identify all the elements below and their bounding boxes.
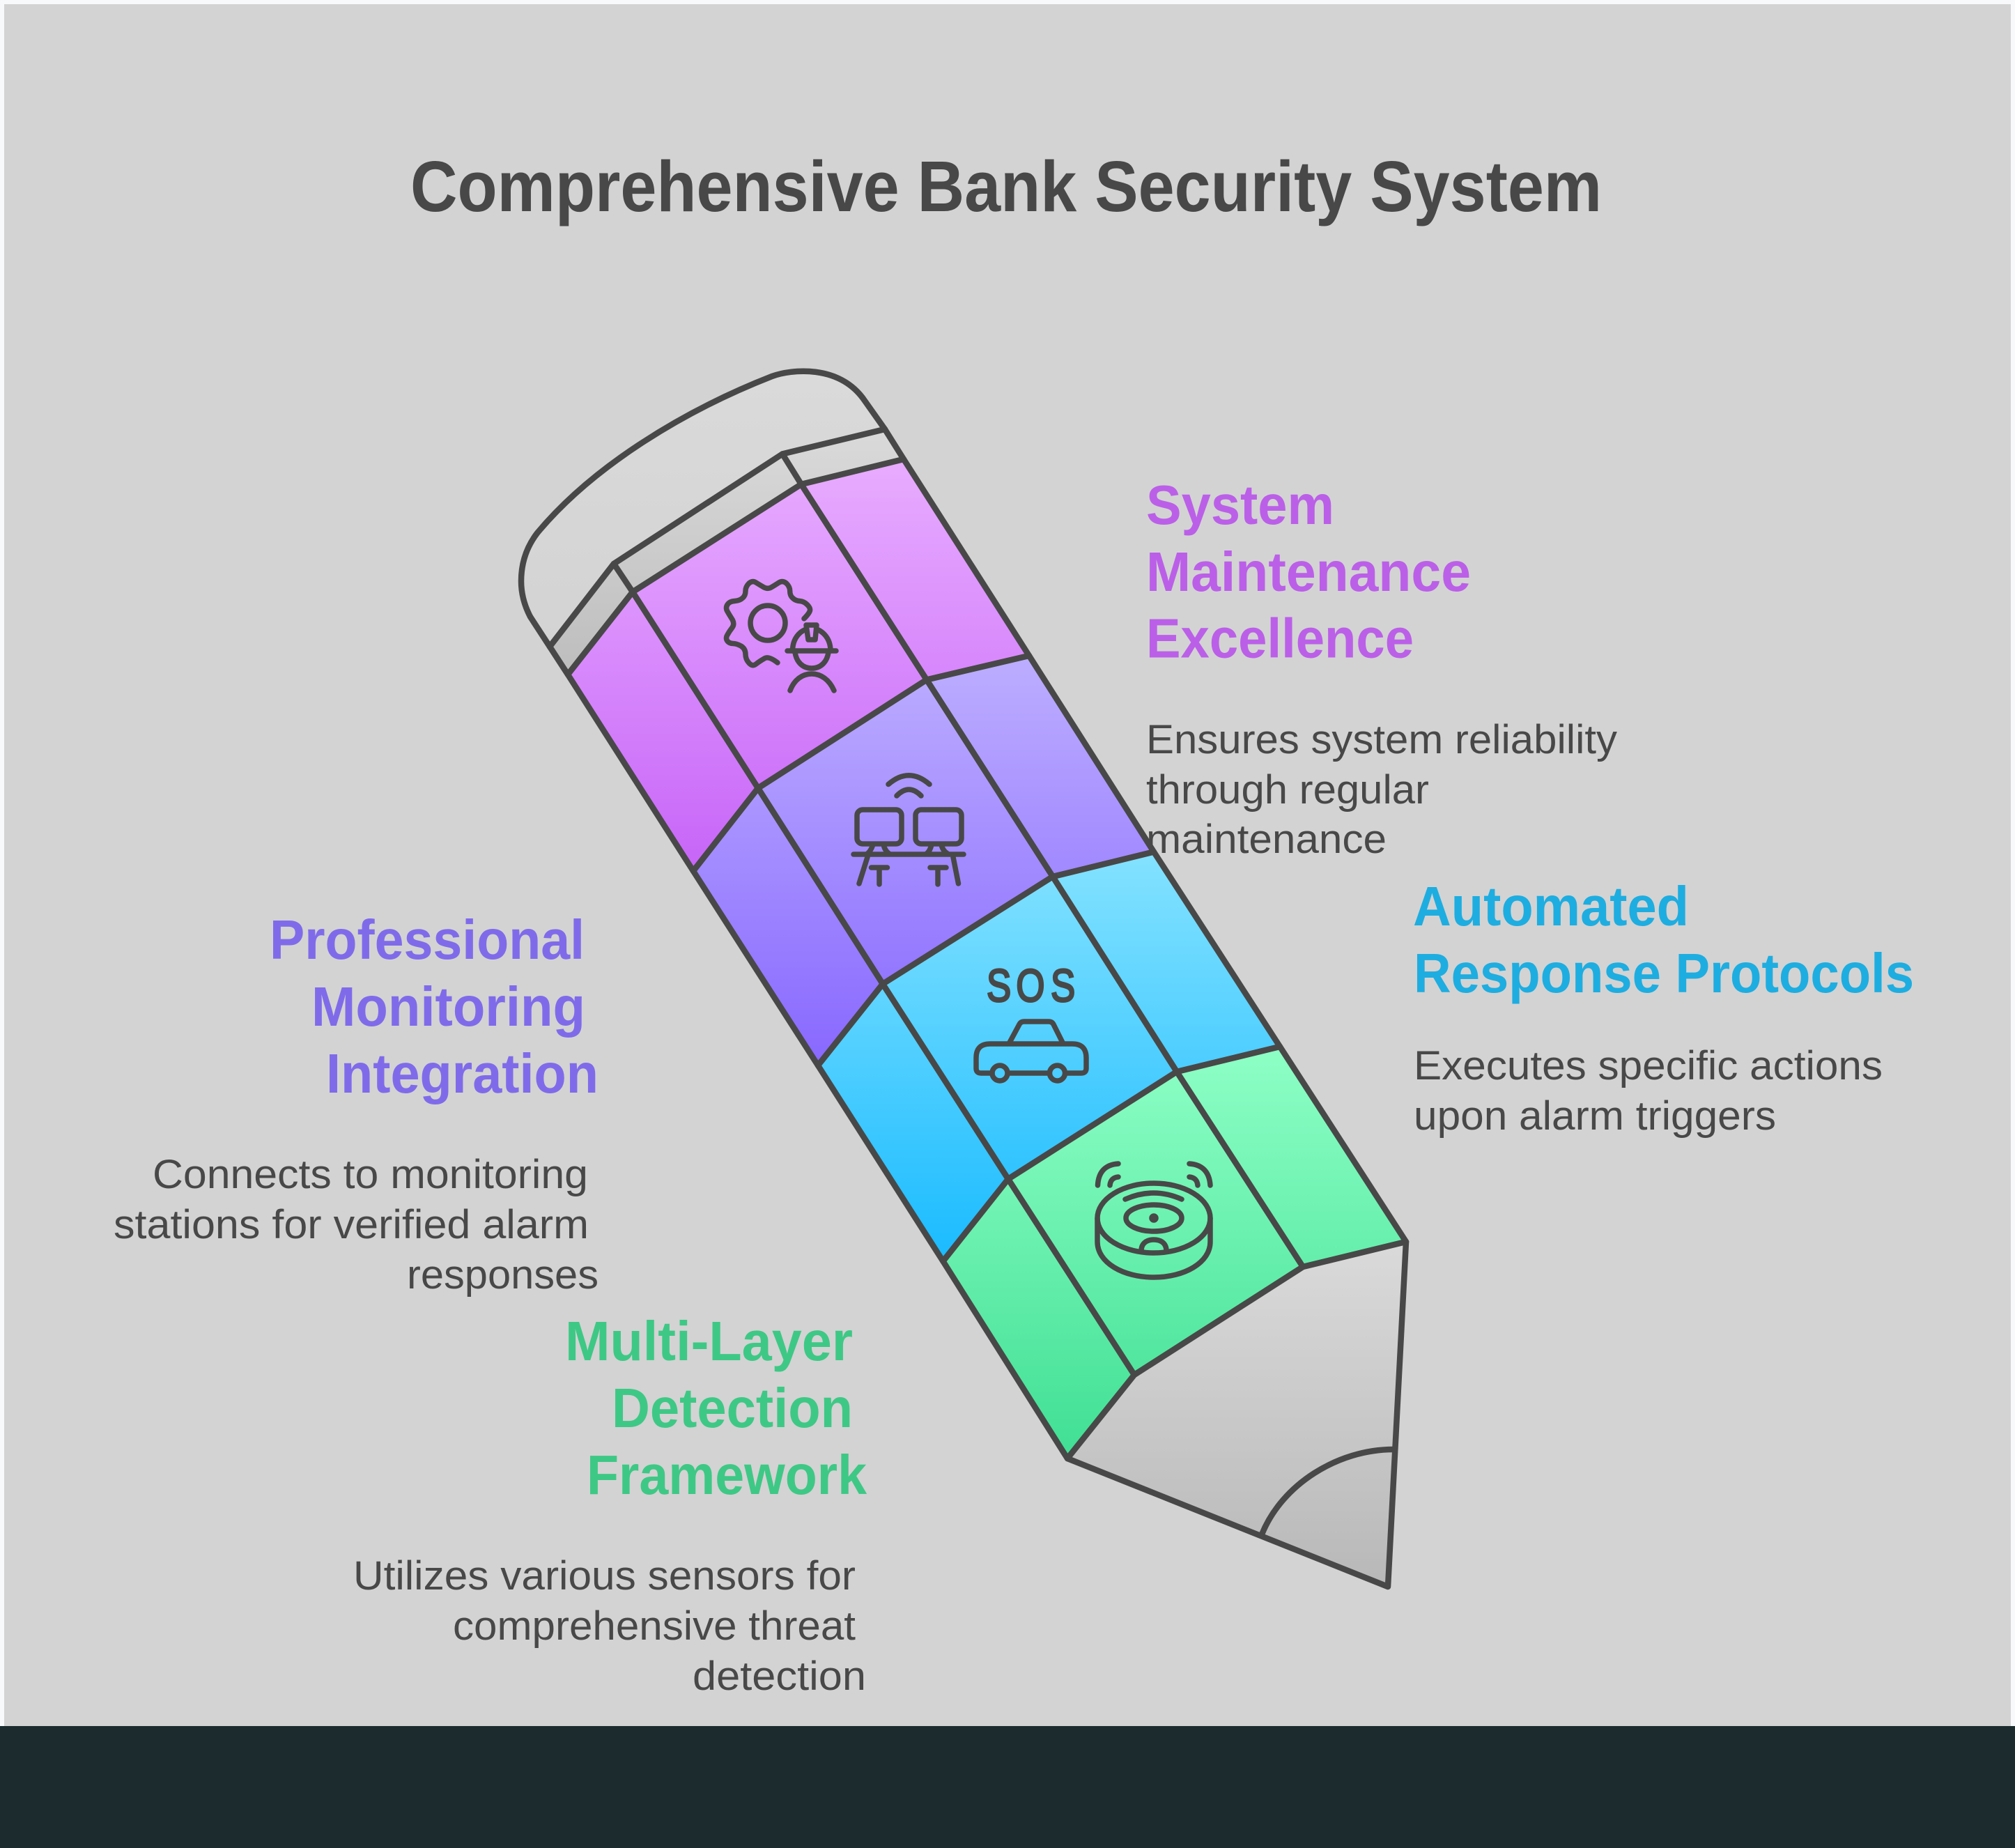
- footer bar: [0, 1726, 2015, 1848]
- heading: professional monitoring: Professional: [270, 909, 585, 971]
- segment: system maintenance: [568, 459, 1029, 871]
- pencil ferrule band: [550, 429, 904, 675]
- heading: multi-layer detection: Multi-Layer: [565, 1310, 853, 1372]
- description: multi-layer detection: comprehensive threat: [453, 1603, 856, 1649]
- segment: automated response: [818, 852, 1280, 1261]
- description: multi-layer detection: [353, 1553, 866, 1699]
- label: automated response: [1413, 875, 1914, 1139]
- heading: automated response: [1413, 875, 1914, 1004]
- description: multi-layer detection: Utilizes various sensors for: [353, 1553, 856, 1599]
- description: automated response: Executes specific actions: [1414, 1043, 1883, 1088]
- icon: SOS car: SOS: [987, 960, 1075, 1011]
- description: multi-layer detection: detection: [693, 1654, 866, 1699]
- heading: professional monitoring: [270, 909, 599, 1104]
- description: system maintenance: [1146, 717, 1617, 862]
- description: professional monitoring: [114, 1152, 599, 1298]
- icon: gear and worker: [726, 582, 836, 691]
- title: Comprehensive Bank Security System: [410, 146, 1602, 226]
- description: professional monitoring: Connects to monitoring: [153, 1152, 588, 1197]
- label: system maintenance: [1146, 474, 1617, 862]
- heading: professional monitoring: Monitoring: [311, 976, 585, 1038]
- label: professional monitoring: [114, 909, 599, 1298]
- description: system maintenance: maintenance: [1146, 817, 1387, 862]
- description: professional monitoring: stations for verified alarm: [114, 1202, 589, 1247]
- segment: professional monitoring: [693, 656, 1154, 1065]
- heading: professional monitoring: Integration: [326, 1042, 599, 1104]
- icon: robot sensor: [1097, 1164, 1210, 1277]
- icon: monitoring desks: [854, 776, 964, 884]
- description: system maintenance: through regular: [1146, 767, 1429, 813]
- heading: system maintenance: Maintenance: [1146, 541, 1471, 603]
- heading: multi-layer detection: [565, 1310, 867, 1506]
- description: system maintenance: Ensures system reliability: [1146, 717, 1617, 762]
- description: automated response: upon alarm triggers: [1414, 1093, 1776, 1139]
- segment: multi-layer detection: [943, 1047, 1406, 1458]
- heading: automated response: Automated: [1413, 875, 1689, 937]
- heading: multi-layer detection: Detection: [612, 1377, 853, 1439]
- heading: multi-layer detection: Framework: [587, 1444, 867, 1506]
- pencil tip: [1067, 1242, 1406, 1587]
- icon: SOS car: [976, 960, 1086, 1081]
- heading: system maintenance: System: [1146, 474, 1334, 536]
- pencil eraser cap: [521, 371, 885, 647]
- heading: system maintenance: [1146, 474, 1471, 669]
- heading: system maintenance: Excellence: [1146, 608, 1414, 669]
- description: professional monitoring: responses: [407, 1252, 599, 1298]
- pencil diagram: [521, 371, 1406, 1587]
- description: automated response: [1414, 1043, 1883, 1139]
- label: multi-layer detection: [353, 1310, 867, 1699]
- heading: automated response: Response Protocols: [1414, 942, 1914, 1004]
